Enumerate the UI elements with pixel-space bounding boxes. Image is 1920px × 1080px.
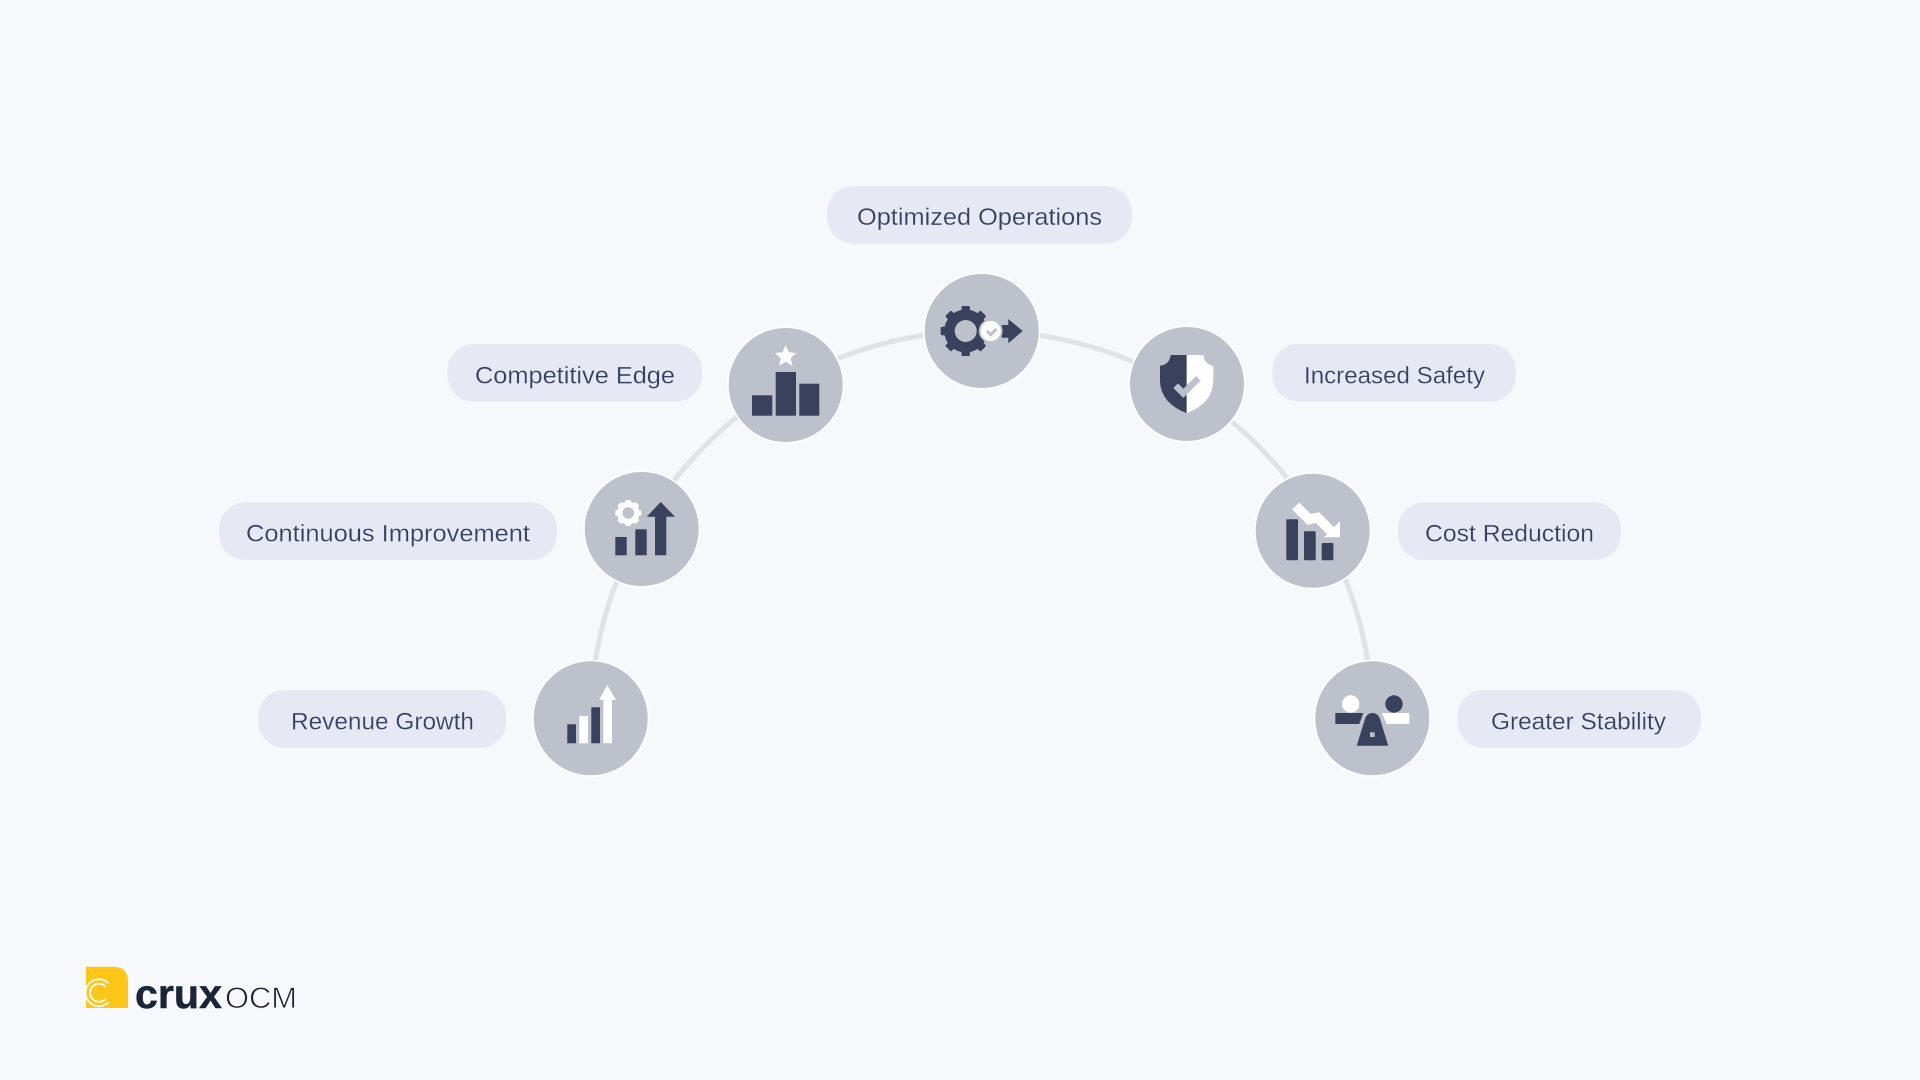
icon: gear with check and arrow xyxy=(924,273,1040,389)
label: Cost Reduction: Cost Reduction xyxy=(1425,520,1594,548)
label: Optimized Operations xyxy=(827,186,1132,244)
label: Optimized Operations: Optimized Operations xyxy=(857,204,1102,231)
label: Greater Stability xyxy=(1458,690,1701,748)
icon: podium with star xyxy=(728,327,844,443)
label: Cost Reduction xyxy=(1398,502,1621,560)
label: Increased Safety: Increased Safety xyxy=(1304,362,1485,390)
logo: crux OCM: OCM xyxy=(225,982,297,1015)
connecting arc xyxy=(590,331,1372,722)
icon: revenue bars with arrow xyxy=(533,660,648,776)
icon: half shield with check xyxy=(1129,326,1245,442)
label: Continuous Improvement xyxy=(219,502,557,560)
label: Competitive Edge xyxy=(448,344,702,402)
label: Greater Stability: Greater Stability xyxy=(1491,708,1666,736)
label: Increased Safety xyxy=(1272,344,1516,402)
label: Continuous Improvement: Continuous Improvement xyxy=(246,520,530,548)
icon: gear, bars and up arrow xyxy=(584,471,700,587)
icon: falling cost bars with arrow xyxy=(1255,473,1370,588)
label: Revenue Growth: Revenue Growth xyxy=(291,708,474,736)
logo: crux OCM xyxy=(85,967,297,1017)
icon: balance scale xyxy=(1314,660,1430,776)
label: Competitive Edge: Competitive Edge xyxy=(475,362,675,390)
logo: crux OCM: crux xyxy=(135,971,222,1017)
label: Revenue Growth xyxy=(258,690,506,748)
